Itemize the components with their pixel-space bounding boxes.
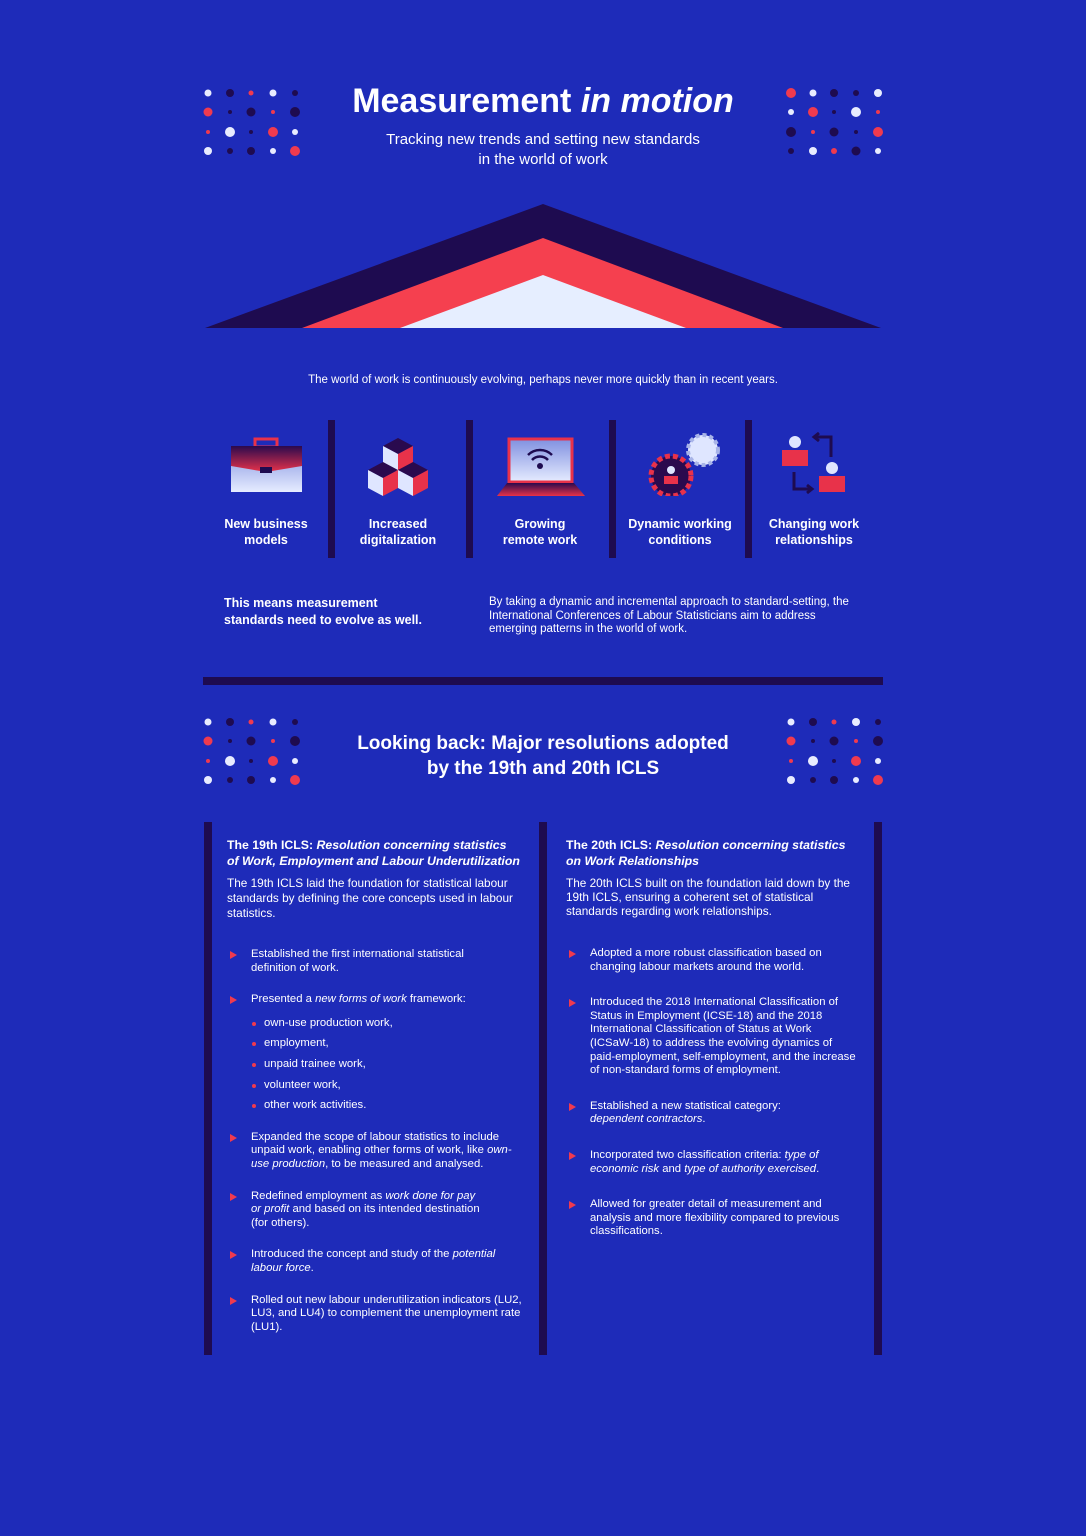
bullet list: definition of work. [251, 962, 339, 974]
section heading: by the 19th and 20th ICLS [427, 758, 659, 779]
dot grid: top right [786, 88, 883, 156]
panel heading: The 20th ICLS: Resolution concerning statistics on Work Relationships [566, 838, 845, 868]
dot grid: top left [204, 89, 300, 156]
bullet list: Rolled out new labour underutilization indicators (LU2, LU3, and LU4) to complement the unemployment rate (LU1). [251, 1294, 522, 1333]
item: new business models [224, 438, 308, 547]
roof graphic [205, 204, 881, 328]
icon: gears [648, 433, 720, 496]
bullet list: volunteer work, [264, 1079, 341, 1091]
emphasis text: standards need to evolve as well. [224, 612, 422, 626]
subtitle: in the world of work [478, 151, 608, 168]
bullet list: unpaid trainee work, [264, 1058, 366, 1070]
item: dynamic working conditions: conditions [648, 533, 712, 547]
item: growing remote work [497, 438, 585, 547]
dot grid: bottom left [204, 718, 300, 785]
bullet list: dependent contractors. [590, 1113, 706, 1125]
icon: people swap [782, 432, 845, 494]
bullet list: Presented a new forms of work framework: [251, 993, 466, 1005]
item: changing work relationships: relationships [775, 533, 853, 547]
item: growing remote work: remote work [503, 533, 577, 547]
subtitle: Tracking new trends and setting new standards [386, 131, 700, 148]
bullet list: Incorporated two classification criteria: type of economic risk and type of authority exercised. [590, 1149, 819, 1175]
panel: 20th ICLS [566, 838, 856, 1237]
panel intro: The 20th ICLS built on the foundation laid down by the 19th ICLS, ensuring a coherent set of statistical standards regarding work relationships. [566, 876, 850, 918]
panel heading: of Work, Employment and Labour Underutilization [227, 854, 520, 868]
icon: briefcase [231, 438, 302, 492]
bullet list [569, 947, 856, 1237]
bullet list: or profit and based on its intended destination [251, 1203, 480, 1215]
icon: cubes [368, 438, 428, 496]
bullet list: Established the first international statistical [251, 948, 464, 960]
bullet list [230, 948, 522, 1333]
bullet list: Introduced the concept and study of the potential [251, 1248, 495, 1260]
item: new business models: New business [224, 517, 308, 531]
item: growing remote work: Growing [515, 517, 565, 531]
bullet list: labour force. [251, 1262, 314, 1274]
bullet list: Redefined employment as work done for pay [251, 1190, 475, 1202]
bullet list: (for others). [251, 1217, 309, 1229]
dot grid: bottom right [786, 718, 883, 785]
panel intro: The 19th ICLS laid the foundation for statistical labour standards by defining the core concepts used in labour statistics. [227, 876, 513, 920]
section heading [357, 733, 729, 779]
section divider [203, 677, 883, 685]
emphasis text: This means measurement [224, 596, 378, 610]
item: changing work relationships [769, 432, 859, 547]
item: dynamic working conditions: Dynamic working [628, 517, 732, 531]
explanation text: By taking a dynamic and incremental approach to standard-setting, the International Conferences of Labour Statisticians aim to address emerging patterns in the world of work. [489, 596, 849, 635]
icon: laptop [497, 438, 585, 496]
bullet list: Established a new statistical category: [590, 1100, 781, 1112]
panel: 19th ICLS [227, 838, 522, 1333]
bullet list: Allowed for greater detail of measurement and analysis and more flexibility compared to previous classifications. [590, 1198, 839, 1237]
item: increased digitalization: Increased [369, 517, 427, 531]
bullet list: other work activities. [264, 1099, 366, 1111]
emphasis text [224, 596, 422, 626]
title: Measurement in motion [352, 82, 734, 120]
item: increased digitalization: digitalization [360, 533, 436, 547]
item: changing work relationships: Changing work [769, 517, 859, 531]
column bars [204, 822, 212, 1355]
section heading: Looking back: Major resolutions adopted [357, 733, 729, 754]
item: dynamic working conditions [628, 433, 732, 547]
intro text: The world of work is continuously evolving, perhaps never more quickly than in recent years. [308, 374, 778, 386]
item: increased digitalization [360, 438, 436, 547]
panel heading: The 19th ICLS: Resolution concerning statistics [227, 838, 506, 852]
dividers [328, 420, 335, 558]
subtitle [386, 131, 700, 168]
bullet list: own-use production work, [264, 1017, 393, 1029]
bullet list: employment, [264, 1037, 329, 1049]
bullet list: Adopted a more robust classification based on changing labour markets around the world. [590, 947, 822, 973]
bullet list: Expanded the scope of labour statistics to include unpaid work, enabling other forms of work, like own-use production, to be measured and analysed. [251, 1131, 512, 1170]
item: new business models: models [244, 533, 288, 547]
panel heading [227, 838, 520, 868]
bullet list: Introduced the 2018 International Classification of Status in Employment (ICSE-18) and the 2018 International Classification of Status at Work (ICSaW-18) to address the evolving dynamics of paid-employment, self-employment, and the increase of non-standard forms of employment. [590, 996, 856, 1076]
